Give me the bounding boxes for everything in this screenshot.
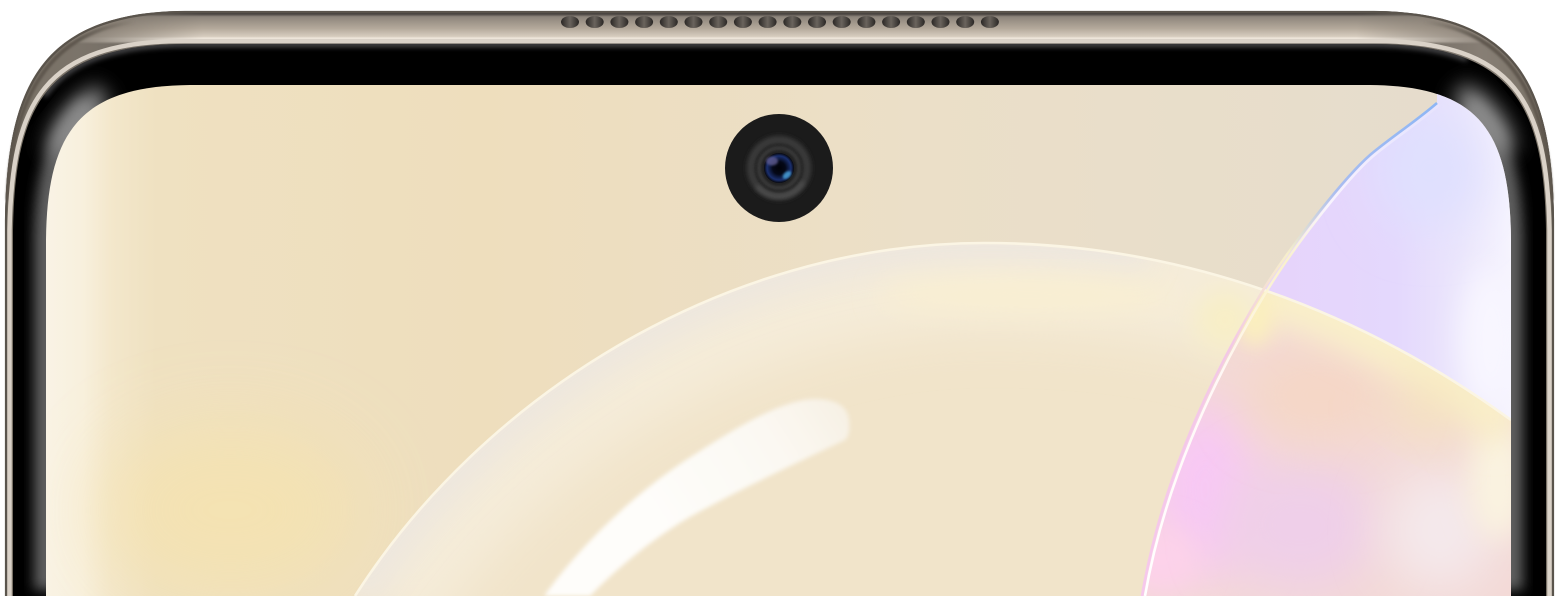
lilac wave panel — [1266, 94, 1511, 418]
white highlight streak — [544, 399, 849, 596]
iridescent area inside bubble — [1144, 292, 1511, 596]
translucent bubble — [340, 240, 1528, 596]
warm glow lower left — [82, 436, 332, 583]
speaker grille — [561, 16, 999, 28]
front camera — [725, 114, 833, 222]
wave edge line — [1142, 103, 1439, 596]
lens rings — [746, 135, 812, 201]
lens glass — [764, 153, 794, 183]
bubble rim — [355, 243, 1511, 596]
